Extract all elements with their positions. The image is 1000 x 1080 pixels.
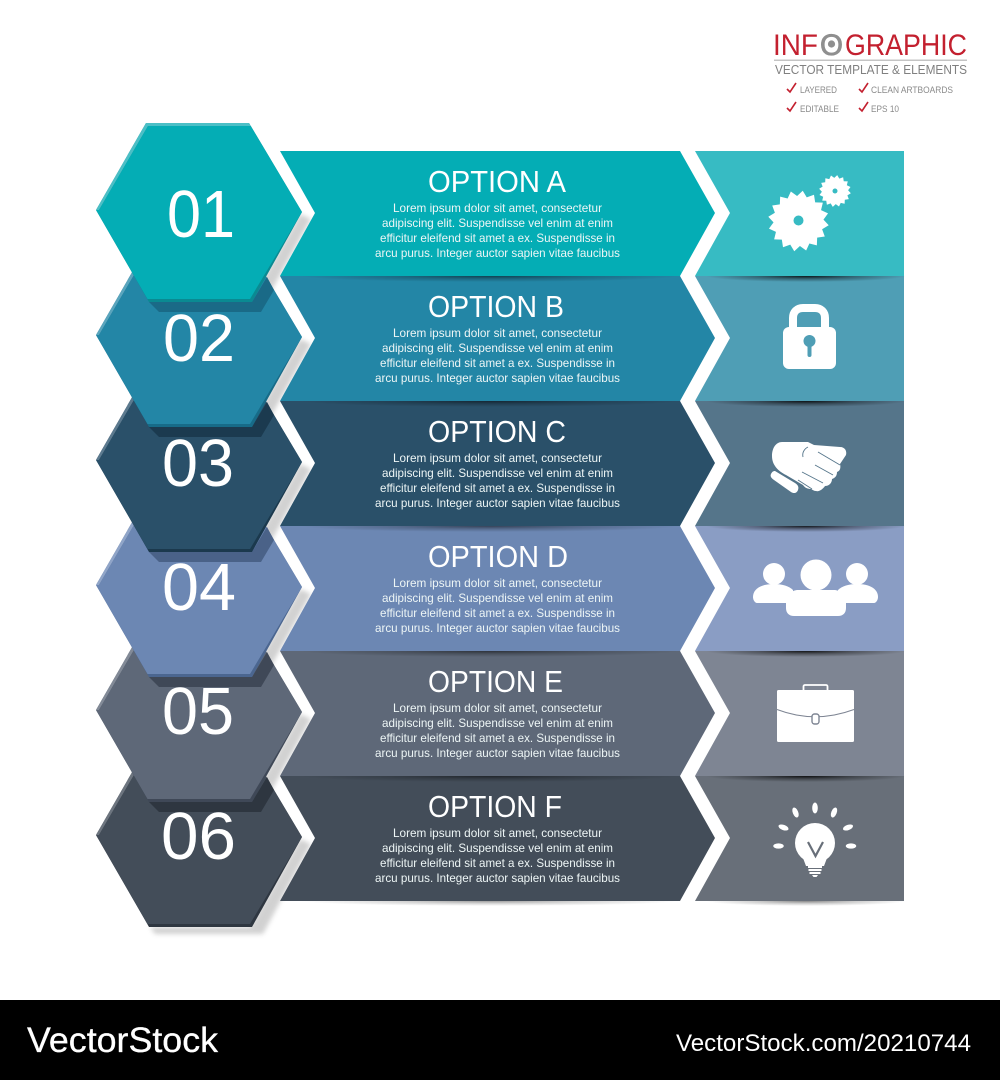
option C text: [375, 414, 620, 510]
option B text: OPTION B: [428, 289, 564, 324]
hexagon 01: [96, 123, 302, 312]
option E text: adipiscing elit. Suspendisse vel enim at enim: [382, 716, 613, 730]
option E band: [280, 651, 715, 776]
feature checklist: [787, 83, 953, 115]
option D text: arcu purus. Integer auctor sapien vitae faucibus: [375, 621, 620, 635]
icon: gears: [764, 173, 853, 255]
option B icon panel: [695, 276, 904, 401]
logo title: GRAPHIC: [845, 29, 967, 62]
option E text: [375, 664, 620, 760]
feature checklist: EDITABLE: [800, 104, 839, 115]
icon: briefcase: [777, 685, 854, 742]
option A text: adipiscing elit. Suspendisse vel enim at enim: [382, 216, 613, 230]
hexagon 06: 06: [161, 799, 236, 874]
hexagon 04: [96, 498, 302, 687]
option B text: Lorem ipsum dolor sit amet, consectetur: [393, 326, 602, 340]
option F band: [280, 776, 715, 901]
row: option B: [280, 276, 906, 407]
option C text: OPTION C: [428, 414, 566, 449]
soft hexagon shadows on white: [150, 214, 311, 934]
option E icon panel: [695, 651, 904, 776]
footer image id: VectorStock.com/20210744: [676, 1030, 971, 1057]
option D text: adipiscing elit. Suspendisse vel enim at enim: [382, 591, 613, 605]
option D icon panel: [695, 526, 904, 651]
row: option D: [280, 526, 906, 657]
hexagon 06: [96, 748, 302, 927]
option E text: arcu purus. Integer auctor sapien vitae faucibus: [375, 746, 620, 760]
option C text: arcu purus. Integer auctor sapien vitae faucibus: [375, 496, 620, 510]
option F icon panel: [695, 776, 904, 901]
option C text: Lorem ipsum dolor sit amet, consectetur: [393, 451, 602, 465]
option E text: efficitur eleifend sit amet a ex. Suspendisse in: [380, 731, 615, 745]
option A text: OPTION A: [428, 164, 566, 199]
option B text: efficitur eleifend sit amet a ex. Suspendisse in: [380, 356, 615, 370]
option D band: [280, 526, 715, 651]
header logo: infographic vector template: [773, 29, 967, 115]
row: option E: [280, 651, 906, 782]
row: option F: [280, 776, 906, 906]
option C icon panel: [695, 401, 904, 526]
option D text: OPTION D: [428, 539, 568, 574]
logo subtitle: VECTOR TEMPLATE & ELEMENTS: [775, 62, 967, 77]
hexagon 05: [96, 623, 302, 812]
option B band: [280, 276, 715, 401]
hexagon 03: 03: [162, 426, 234, 501]
logo title: O: [820, 29, 843, 62]
option E text: OPTION E: [428, 664, 563, 699]
option D text: Lorem ipsum dolor sit amet, consectetur: [393, 576, 602, 590]
option F text: Lorem ipsum dolor sit amet, consectetur: [393, 826, 602, 840]
option D text: efficitur eleifend sit amet a ex. Suspendisse in: [380, 606, 615, 620]
option A text: [375, 164, 620, 260]
option B text: [375, 289, 620, 385]
feature checklist: LAYERED: [800, 85, 837, 96]
hexagon 02: 02: [163, 301, 235, 376]
option C text: adipiscing elit. Suspendisse vel enim at enim: [382, 466, 613, 480]
footer bar: [0, 1000, 1000, 1080]
option D text: [375, 539, 620, 635]
option F text: arcu purus. Integer auctor sapien vitae faucibus: [375, 871, 620, 885]
icon: group of people: [753, 560, 878, 616]
option A text: efficitur eleifend sit amet a ex. Suspendisse in: [380, 231, 615, 245]
row: option C: [280, 401, 906, 532]
option A icon panel: [695, 151, 904, 276]
option B text: arcu purus. Integer auctor sapien vitae faucibus: [375, 371, 620, 385]
option A text: arcu purus. Integer auctor sapien vitae faucibus: [375, 246, 620, 260]
feature checklist: CLEAN ARTBOARDS: [871, 85, 953, 96]
hexagon 01: 01: [167, 177, 235, 252]
option B text: adipiscing elit. Suspendisse vel enim at enim: [382, 341, 613, 355]
feature checklist: EPS 10: [871, 104, 899, 115]
option C band: [280, 401, 715, 526]
option E text: Lorem ipsum dolor sit amet, consectetur: [393, 701, 602, 715]
icon: handshake: [771, 442, 846, 493]
logo title: INF: [773, 29, 818, 62]
row: option A: [280, 151, 906, 282]
option C text: efficitur eleifend sit amet a ex. Suspendisse in: [380, 481, 615, 495]
option F text: adipiscing elit. Suspendisse vel enim at enim: [382, 841, 613, 855]
hexagon 04: 04: [162, 550, 236, 625]
icon: light bulb: [773, 802, 856, 877]
option F text: efficitur eleifend sit amet a ex. Suspendisse in: [380, 856, 615, 870]
option A text: Lorem ipsum dolor sit amet, consectetur: [393, 201, 602, 215]
option F text: [375, 789, 620, 885]
hexagon 05: 05: [162, 674, 234, 749]
hexagon 03: [96, 373, 302, 562]
hexagon 02: [96, 248, 302, 437]
footer brand: VectorStock: [27, 1021, 219, 1060]
option A band: [280, 151, 715, 276]
option F text: OPTION F: [428, 789, 562, 824]
icon: padlock: [783, 308, 836, 369]
logo title: [773, 29, 967, 62]
